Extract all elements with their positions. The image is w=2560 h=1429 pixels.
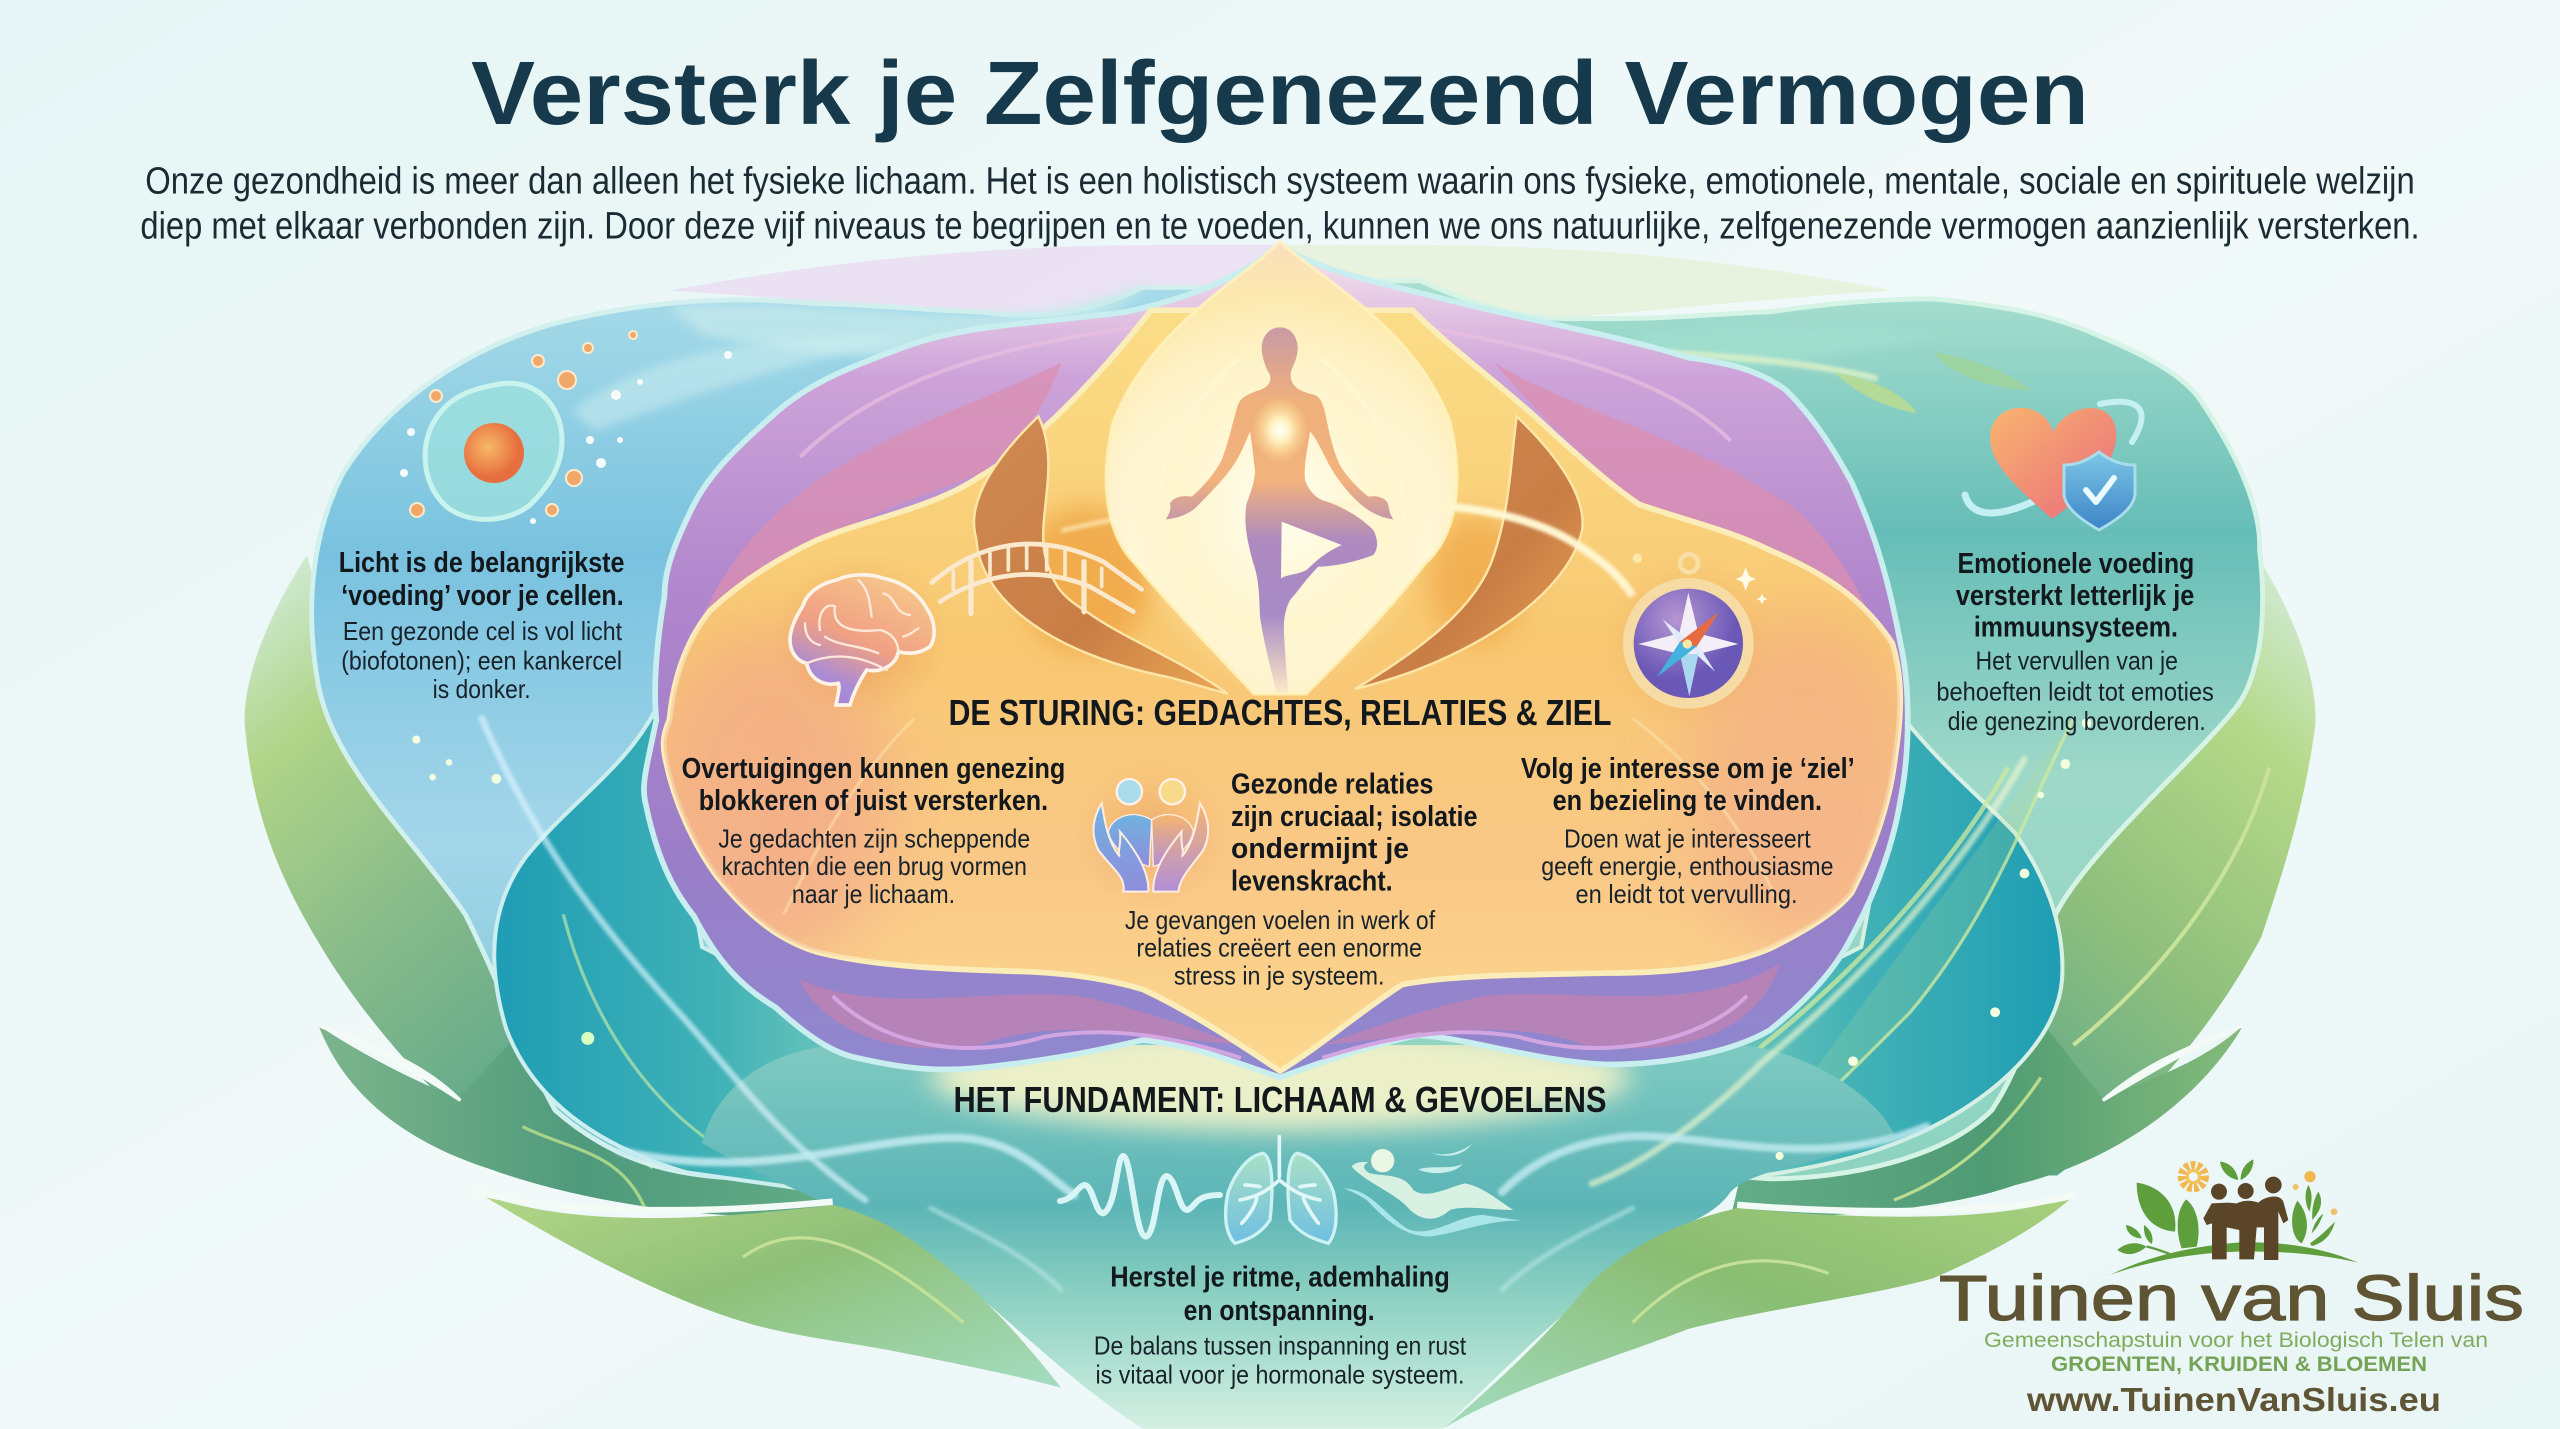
text: beliefs xyxy=(682,753,1065,909)
icon: lungs xyxy=(1226,1137,1336,1243)
panel: lower left teal xyxy=(494,702,931,1200)
leaf: lower right xyxy=(1443,1195,2075,1429)
text: restore rhythm: De balans tussen inspanning en rust xyxy=(1094,1330,1467,1360)
text: restore rhythm: en ontspanning. xyxy=(1184,1295,1375,1327)
text: beliefs: Overtuigingen kunnen genezing xyxy=(682,753,1065,785)
text: light for cells: ‘voeding’ voor je cellen. xyxy=(341,580,624,612)
logo: Tuinen van Sluis xyxy=(1939,1159,2524,1418)
text: relationships: levenskracht. xyxy=(1231,866,1393,898)
text: beliefs: naar je lichaam. xyxy=(792,879,955,909)
logo icon: people and plants xyxy=(2110,1159,2358,1275)
icon: heartbeat line xyxy=(1060,1156,1220,1237)
decoration: sparkles xyxy=(412,718,2091,1160)
heading: de sturing: DE STURING: GEDACHTES, RELATIES & ZIEL xyxy=(949,692,1611,733)
text: follow your interest: Doen wat je interesseert xyxy=(1564,823,1811,853)
text: emotional nourishment: versterkt letterlijk je xyxy=(1956,580,2194,612)
text: follow your interest: Volg je interesse om je ‘ziel’ xyxy=(1521,753,1855,785)
text: restore rhythm xyxy=(1094,1262,1467,1390)
icon: meditating figure xyxy=(1166,327,1393,693)
streaks: flowing light lines xyxy=(482,718,2024,1290)
panel: right green leaves xyxy=(1731,555,2315,1218)
panel: left green leaves xyxy=(245,555,849,1218)
text: relationships: ondermijnt je xyxy=(1231,833,1409,865)
leaf: lower left xyxy=(477,1192,1061,1388)
text: beliefs: Je gedachten zijn scheppende xyxy=(718,823,1030,853)
text: light for cells: Een gezonde cel is vol licht xyxy=(343,616,623,646)
text: relationships: relaties creëert een enorme xyxy=(1136,933,1422,963)
title: Versterk je Zelfgenezend Vermogen xyxy=(471,44,2089,144)
text: emotional nourishment: behoeften leidt tot emoties xyxy=(1936,676,2214,706)
text: relationships: Gezonde relaties xyxy=(1231,768,1433,800)
text: emotional nourishment xyxy=(1936,548,2214,736)
panel: lower right teal xyxy=(1633,718,2073,1184)
icon: heart with shield xyxy=(1965,402,2142,530)
icon: bridge xyxy=(932,544,1142,613)
panel: purple lobe xyxy=(644,245,1908,1078)
panel: left blue lobe xyxy=(312,281,1306,1179)
text: relationships xyxy=(1125,768,1478,990)
text: follow your interest: geeft energie, enthousiasme xyxy=(1541,851,1833,881)
text: relationships: Je gevangen voelen in werk of xyxy=(1125,905,1436,935)
text blocks xyxy=(140,159,2420,1390)
panel: central orange yellow shape xyxy=(645,310,1918,1071)
panel: right teal lobe xyxy=(1257,281,2263,1179)
text: relationships: stress in je systeem. xyxy=(1174,960,1384,990)
text: emotional nourishment: Het vervullen van je xyxy=(1976,645,2178,675)
text: beliefs: krachten die een brug vormen xyxy=(722,851,1027,881)
heading: het fundament: HET FUNDAMENT: LICHAAM & GEVOELENS xyxy=(953,1079,1607,1120)
icon: cell with light particles xyxy=(400,331,732,524)
text: follow your interest: en leidt tot vervulling. xyxy=(1576,879,1798,909)
text: relationships: zijn cruciaal; isolatie xyxy=(1231,801,1478,833)
icon: relaxing figure on waves xyxy=(1343,1144,1522,1237)
text: emotional nourishment: die genezing bevorderen. xyxy=(1948,706,2206,736)
intro text xyxy=(140,159,2420,246)
text: follow your interest: en bezieling te vinden. xyxy=(1553,785,1822,817)
text: light for cells: is donker. xyxy=(433,674,531,704)
text: emotional nourishment: Emotionele voeding xyxy=(1958,548,2194,580)
text: emotional nourishment: immuunsysteem. xyxy=(1974,612,2178,644)
text: beliefs: blokkeren of juist versterken. xyxy=(699,785,1048,817)
text: light for cells: Licht is de belangrijkste xyxy=(339,547,624,579)
panel: central glowing petal xyxy=(1106,242,1457,694)
logo url: www.TuinenVanSluis.eu xyxy=(2026,1381,2441,1418)
text: restore rhythm: is vitaal voor je hormonale systeem. xyxy=(1096,1360,1464,1390)
text: light for cells: (biofotonen); een kankercel xyxy=(341,645,622,675)
icon: brain xyxy=(770,553,950,720)
logo tagline 1: Gemeenschapstuin voor het Biologisch Telen van xyxy=(1984,1329,2488,1352)
icon: compass xyxy=(1602,554,1775,730)
text: light for cells xyxy=(339,547,624,704)
text: follow your interest xyxy=(1521,753,1855,909)
streak: light arc toward compass xyxy=(1061,504,1633,596)
icon: people with caring hands xyxy=(1073,763,1230,910)
panel: fundament background xyxy=(702,1025,1894,1429)
logo tagline 2: GROENTEN, KRUIDEN & BLOEMEN xyxy=(2051,1353,2427,1376)
illustration: layered body shapes xyxy=(245,242,2315,1429)
text: restore rhythm: Herstel je ritme, ademhaling xyxy=(1110,1262,1450,1294)
panel: pale top lobes xyxy=(669,245,1892,335)
logo name: Tuinen van Sluis xyxy=(1939,1262,2524,1334)
